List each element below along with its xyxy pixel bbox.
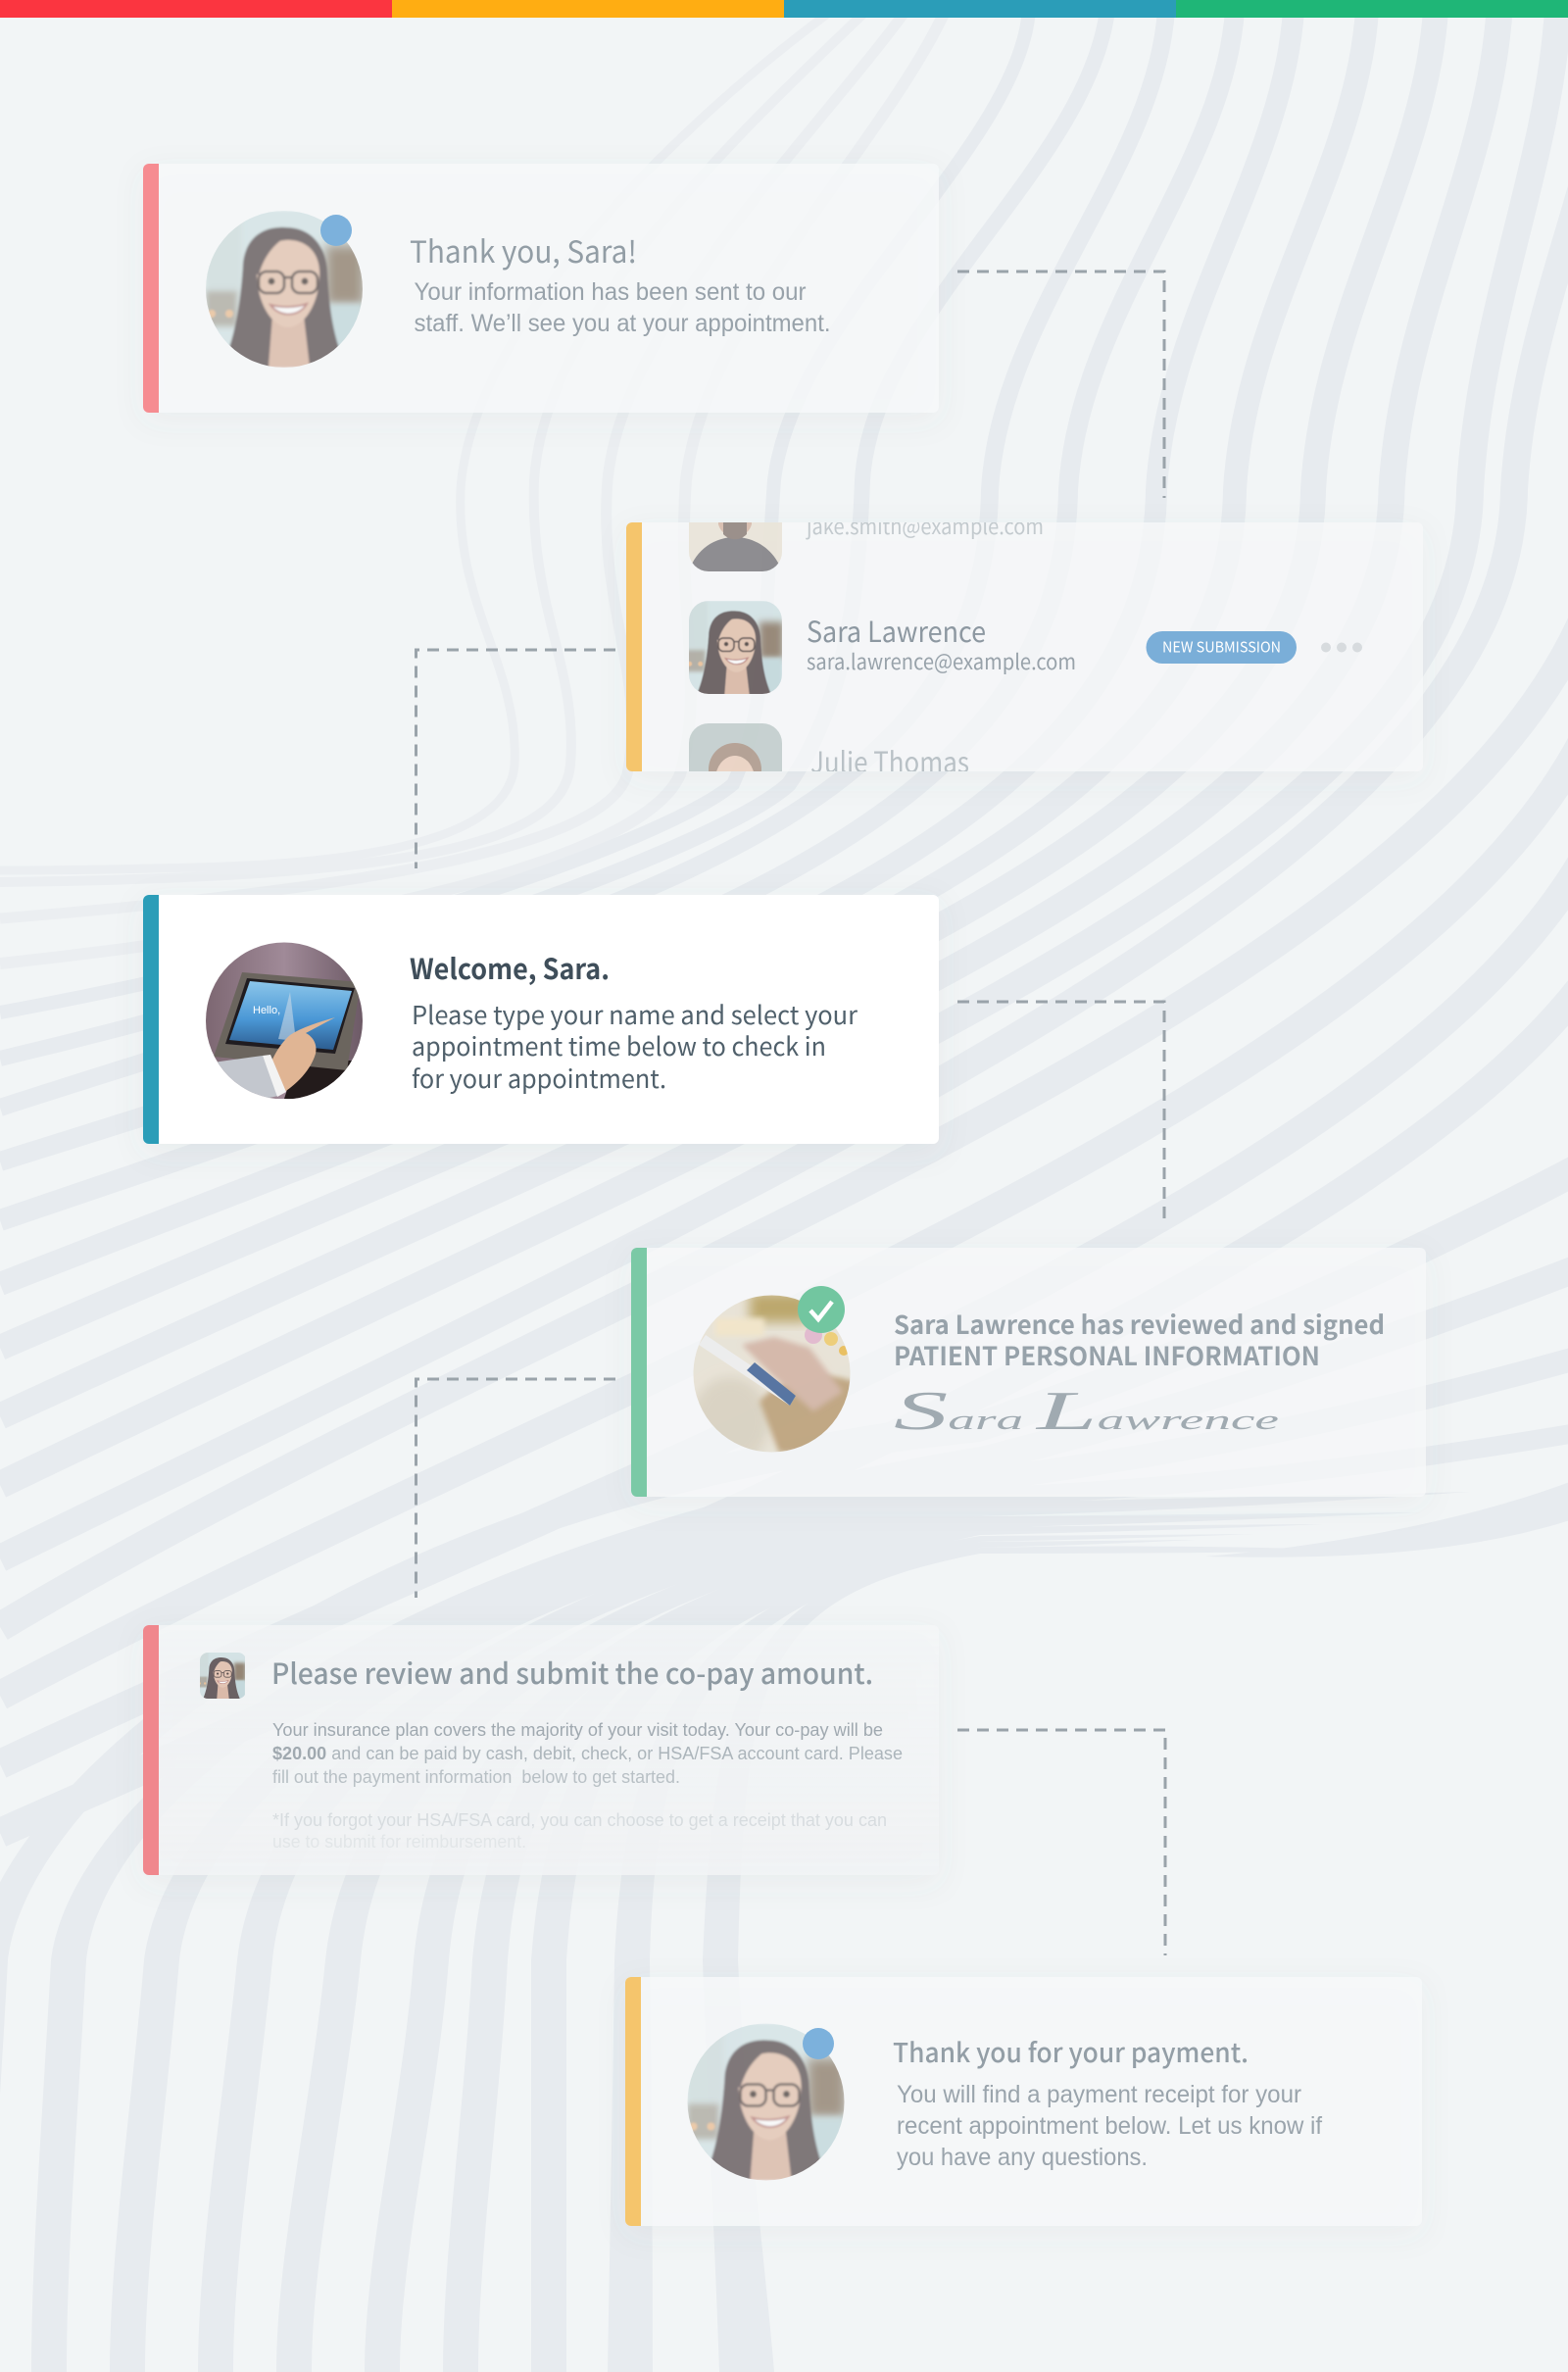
name: Julie: Julie Thomas [810, 740, 969, 781]
panel: welcome [143, 895, 939, 1144]
heading: Thank you, Sara! [410, 227, 637, 272]
panel: patient list [626, 522, 1423, 771]
message: Your insurance plan covers the majority of your visit today. Your co-pay will be [272, 1720, 883, 1740]
photo: small avatar [198, 1653, 246, 1700]
more menu dots [1321, 643, 1362, 653]
message: $20.00 and can be paid by cash, debit, check, or HSA/FSA account card. Please [272, 1744, 903, 1763]
panel: co-pay [143, 1625, 939, 1875]
photo: phone in hand [694, 1296, 851, 1453]
heading: Thank you for your payment. [893, 2032, 1249, 2070]
top colour bar [0, 0, 1568, 18]
badge [1147, 631, 1297, 664]
heading [894, 1306, 1385, 1373]
photo: tablet kiosk: Hello, [253, 1005, 280, 1016]
email: Sara: sara.lawrence@example.com [807, 645, 1076, 676]
message: recent appointment below. Let us know if [897, 2112, 1322, 2140]
heading: Please review and submit the co-pay amount. [271, 1652, 873, 1693]
footnote: *If you forgot your HSA/FSA card, you can choose to get a receipt that you can [272, 1810, 887, 1830]
status dot [803, 2028, 834, 2059]
photo: Sara [686, 601, 783, 697]
photo: tablet kiosk [206, 942, 365, 1103]
photo: smiling woman [688, 2023, 847, 2180]
heading: Sara Lawrence has reviewed and signed [894, 1306, 1385, 1342]
connector: card 5 to card 6 [957, 1730, 1165, 1955]
panel: signed form [631, 1248, 1426, 1497]
message: Your information has been sent to our [414, 278, 806, 306]
message: appointment time below to check in [412, 1027, 826, 1063]
message: You will find a payment receipt for your [897, 2081, 1301, 2108]
footnote: use to submit for reimbursement. [272, 1832, 526, 1852]
name: Sara: Sara Lawrence [807, 610, 986, 651]
connector: card 2 to card 3 [416, 650, 615, 868]
message [412, 996, 858, 1096]
badge: NEW SUBMISSION [1162, 637, 1281, 657]
footnote [272, 1810, 887, 1852]
photo: Julie [689, 723, 782, 771]
message [272, 1720, 903, 1787]
photo: Jake [689, 522, 782, 571]
message: fill out the payment information below to get started. [272, 1767, 680, 1787]
connector: card 3 to card 4 [957, 1002, 1164, 1226]
message [414, 278, 831, 337]
check badge [798, 1286, 845, 1333]
panel: thank you Sara [143, 164, 939, 413]
panel: payment thanks [625, 1977, 1323, 2226]
heading: Welcome, Sara. [410, 947, 610, 988]
email: Jake: jake.smith@example.com [806, 510, 1044, 541]
message: Please type your name and select your [412, 996, 858, 1032]
message: you have any questions. [897, 2144, 1148, 2171]
connector: card 4 to card 5 [416, 1379, 615, 1598]
connector: card 1 to card 2 [957, 272, 1164, 498]
heading: PATIENT PERSONAL INFORMATION [894, 1337, 1320, 1373]
message: staff. We’ll see you at your appointment. [414, 310, 831, 337]
message: for your appointment. [412, 1060, 666, 1096]
message [897, 2081, 1322, 2171]
signature: S ara L awrence [894, 1381, 1279, 1442]
status dot [320, 215, 352, 246]
photo: smiling woman [206, 211, 365, 368]
